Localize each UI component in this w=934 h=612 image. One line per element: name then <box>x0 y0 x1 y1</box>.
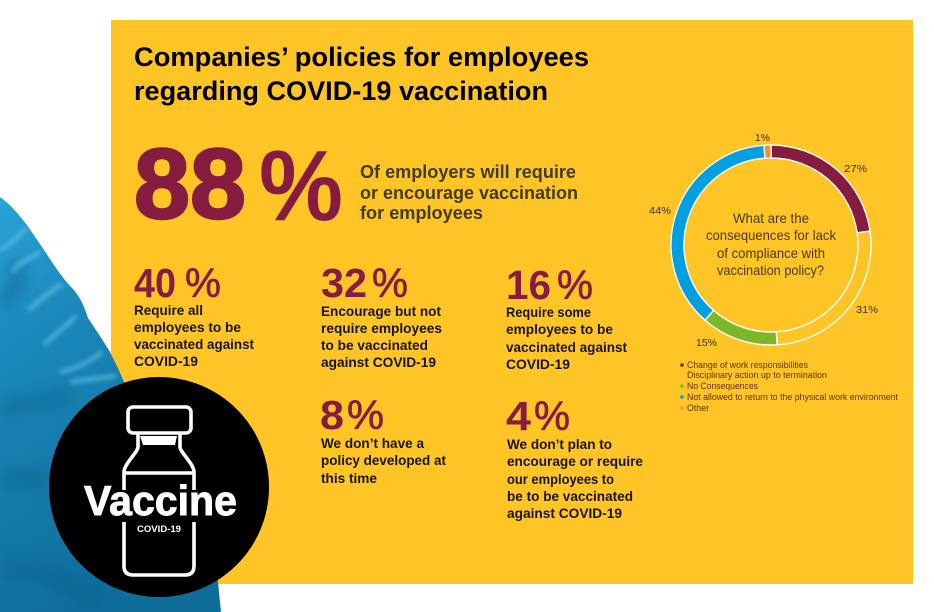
donut centre question <box>706 211 836 278</box>
stat: 8%: % <box>347 392 384 438</box>
stat: 16% <box>506 262 627 372</box>
stat: 40%: employees to be <box>134 320 241 335</box>
donut label: 1%: 1% <box>755 133 770 144</box>
stat: 8%: this time <box>321 471 377 486</box>
badge: vaccine vial icon: COVID-19 <box>137 524 181 535</box>
donut label: 44%: 44% <box>649 206 671 217</box>
stat: 32%: against COVID-19 <box>321 355 436 370</box>
stat: 4%: 4 <box>506 393 531 439</box>
stat: 4%: We don’t plan to <box>507 437 612 452</box>
stat: 4%: against COVID-19 <box>507 506 622 521</box>
stat: 40%: vaccinated against <box>134 337 254 352</box>
stat: 8% <box>320 392 446 486</box>
donut centre question: vaccination policy? <box>717 263 824 278</box>
stat: 4%: encourage or require <box>507 454 643 469</box>
stat: 4%: our employees to <box>507 472 614 487</box>
headline description: or encourage vaccination <box>360 183 578 203</box>
legend: Disciplinary action up to termination <box>687 370 827 380</box>
stat: 16%: 16 <box>506 262 551 308</box>
stat: 32% <box>321 260 442 370</box>
stat: 16%: % <box>557 262 593 308</box>
title <box>134 42 589 106</box>
stat: 8%: policy developed at <box>321 453 446 468</box>
stat: 40% <box>134 260 254 369</box>
badge: vaccine vial icon <box>49 377 269 597</box>
legend: Change of work responsibilities <box>687 360 808 370</box>
stat: 4%: be to be vaccinated <box>507 489 633 504</box>
stat: 16%: vaccinated against <box>506 340 627 355</box>
stat: 32%: to be vaccinated <box>321 338 428 353</box>
stat: 4%: % <box>534 393 570 439</box>
donut chart: consequences <box>649 133 878 349</box>
donut centre question: consequences for lack <box>706 228 836 243</box>
headline stat: 88%: 88 <box>134 128 246 239</box>
donut label: 27%: 27% <box>844 164 867 175</box>
headline description: for employees <box>360 203 483 223</box>
headline description <box>360 162 578 223</box>
stat: 16%: employees to be <box>506 322 613 337</box>
title: regarding COVID-19 vaccination <box>134 76 548 106</box>
stat: 40%: COVID-19 <box>134 354 198 369</box>
stat: 16%: Require some <box>506 305 591 320</box>
stat: 8%: 8 <box>320 392 344 438</box>
stat: 40%: 40 <box>134 260 176 306</box>
donut label: 15%: 15% <box>696 338 717 349</box>
legend: Not allowed to return to the physical work environment <box>687 392 898 402</box>
stat: 32%: Encourage but not <box>321 304 441 319</box>
headline stat: 88%: % <box>259 130 343 242</box>
title: Companies’ policies for employees <box>134 42 589 72</box>
stat: 40%: Require all <box>134 303 203 318</box>
stat: 16%: COVID-19 <box>506 357 570 372</box>
legend: Other <box>687 403 709 413</box>
stat: 40%: % <box>185 260 221 306</box>
stat: 32%: require employees <box>321 321 442 336</box>
donut centre question: of compliance with <box>717 246 825 261</box>
stat: 4% <box>506 393 643 521</box>
panel: yellow background <box>111 20 913 584</box>
stat: 8%: We don’t have a <box>321 436 424 451</box>
headline description: Of employers will require <box>360 162 576 182</box>
headline stat: 88% <box>134 128 343 242</box>
legend <box>680 360 898 413</box>
legend: No Consequences <box>687 381 758 391</box>
stat: 32%: 32 <box>321 260 367 306</box>
stat: 32%: % <box>372 260 408 306</box>
donut label: 31%: 31% <box>856 305 878 316</box>
donut centre question: What are the <box>733 211 809 226</box>
image: blue protective glove <box>0 197 221 612</box>
badge: vaccine vial icon: Vaccine <box>84 477 237 524</box>
